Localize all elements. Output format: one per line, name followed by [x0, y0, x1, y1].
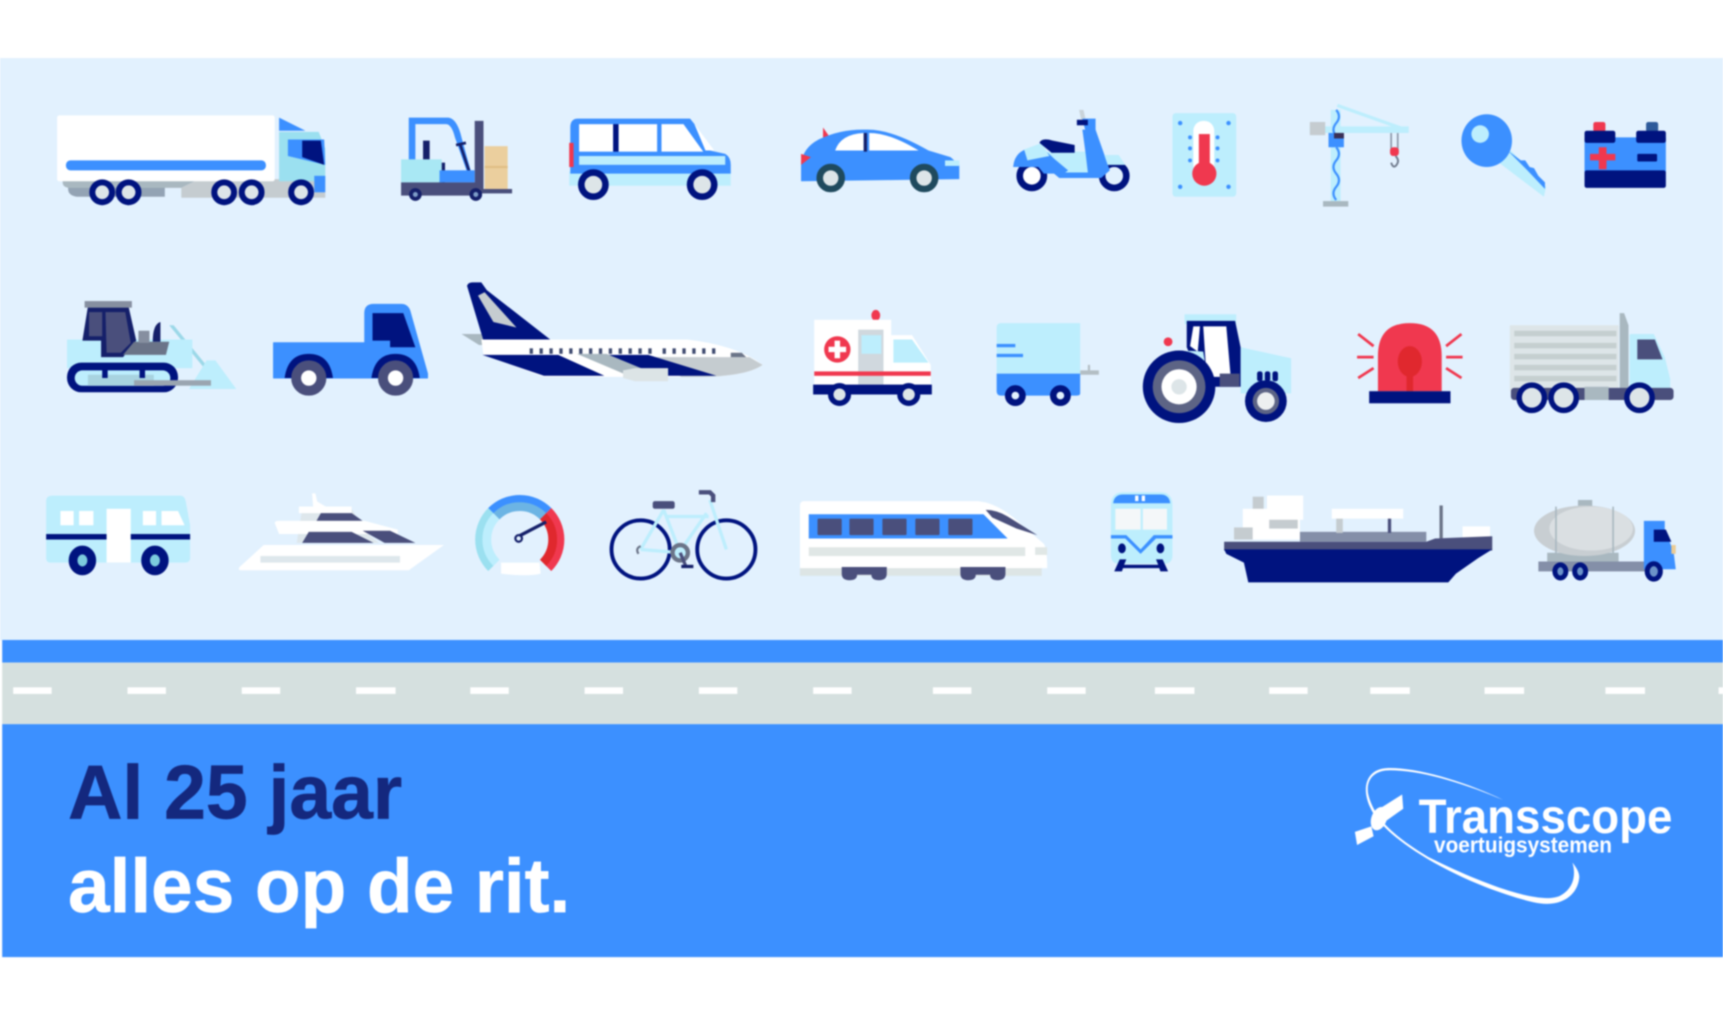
logo wordmark: Transscope	[1419, 790, 1672, 844]
icon: thermometer	[1172, 113, 1236, 197]
icon: key	[1461, 114, 1546, 197]
icon: bulldozer	[67, 301, 236, 392]
icon: metro train	[1111, 492, 1172, 571]
heading: first line: Al 25 jaar	[68, 751, 402, 836]
icon: ambulance	[813, 310, 932, 403]
panel: blue road shoulder	[2, 640, 1723, 663]
icon: speedometer gauge	[479, 499, 560, 575]
icon: high speed train	[800, 501, 1047, 580]
icon: cargo ship	[1224, 496, 1492, 582]
road	[2, 663, 1723, 724]
icon: yacht	[239, 493, 444, 570]
icon: semi truck	[57, 115, 325, 202]
icon: siren light	[1357, 323, 1463, 403]
icon: tanker truck	[1534, 500, 1676, 579]
icon: pickup truck	[274, 304, 427, 391]
panel: blue footer	[2, 724, 1723, 957]
icon: forklift	[401, 118, 512, 199]
icon: battery	[1585, 122, 1666, 188]
icon: van	[569, 119, 731, 197]
icon: bus	[46, 496, 190, 571]
icon: tractor	[1143, 314, 1291, 423]
icon: trailer	[997, 323, 1099, 403]
icon: car	[801, 127, 959, 189]
icon: crane	[1310, 105, 1409, 207]
icon: bicycle	[612, 492, 755, 579]
panel: vehicle icons background	[0, 58, 1723, 640]
logo tagline: voertuigsystemen	[1434, 833, 1612, 858]
heading: second line: alles op de rit.	[68, 844, 570, 929]
icon: airplane	[462, 282, 763, 381]
logo orbit and satellite	[1355, 768, 1579, 904]
logo: Transscope	[1355, 768, 1672, 904]
icon: box truck	[1510, 313, 1674, 410]
icon: scooter	[1013, 110, 1126, 188]
